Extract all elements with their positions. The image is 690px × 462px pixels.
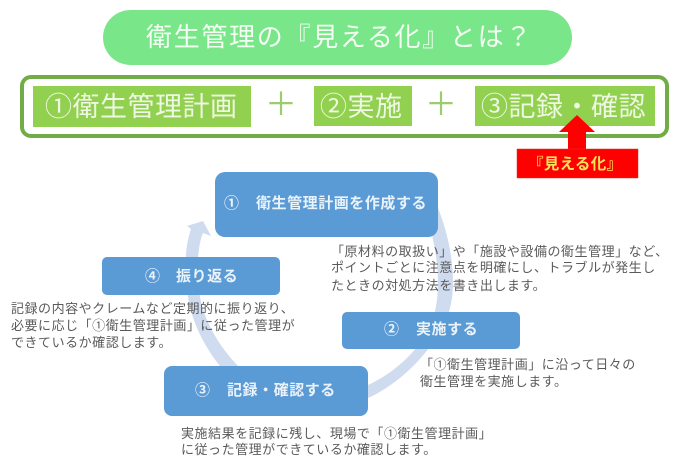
callout (517, 149, 638, 178)
step 3 description: 実施結果を記録に残し、現場で「①衛生管理計画」 (181, 426, 492, 441)
step 4 box: ④ (145, 268, 161, 285)
step 1 box: ① (224, 195, 240, 212)
step 2 description: 「①衛生管理計画」に沿って日々の (420, 357, 636, 372)
step 2 box: 実施する (416, 320, 478, 338)
title: 衛生管理の『見える化』とは？ (146, 22, 533, 52)
step 3 box (164, 366, 368, 416)
step 3 box: 記録・確認する (227, 381, 336, 399)
formula item 3 (475, 86, 655, 126)
step 1 description: 「原材料の取扱い」や「施設や設備の衛生管理」など、 (331, 244, 669, 259)
formula item 1 (33, 86, 251, 127)
title (103, 10, 572, 65)
callout: 『見える化』 (528, 155, 622, 173)
plus sign 2: ＋ (425, 86, 457, 122)
panel: formula (22, 77, 667, 136)
step 4 description: できているか確認します。 (11, 335, 172, 350)
cycle ring arrow (186, 208, 453, 398)
step 2 box: ② (384, 321, 400, 338)
formula item 3: ③記録・確認 (481, 92, 646, 122)
step 3 box: ③ (195, 382, 211, 399)
step 4 box: 振り返る (176, 267, 238, 285)
step 1 box: 衛生管理計画を作成する (256, 194, 427, 212)
formula item 1: ①衛生管理計画 (45, 92, 238, 122)
plus sign 1: ＋ (265, 86, 297, 122)
step 2 description: 衛生管理を実施します。 (420, 374, 568, 389)
step 3 description: に従った管理ができているか確認します。 (181, 442, 437, 457)
callout arrow (559, 115, 595, 150)
step 2 box (342, 312, 520, 349)
step 1 description: たときの対処方法を書き出します。 (331, 278, 546, 293)
step 4 description: 必要に応じ「①衛生管理計画」に従った管理が (11, 318, 295, 333)
step 4 description: 記録の内容やクレームなど定期的に振り返り、 (11, 301, 294, 316)
formula item 2: ②実施 (320, 92, 402, 122)
formula item 2 (314, 86, 412, 126)
step 1 description: ポイントごとに注意点を明確にし、トラブルが発生し (331, 260, 656, 275)
step 1 box (215, 172, 438, 237)
step 4 box (102, 257, 280, 295)
